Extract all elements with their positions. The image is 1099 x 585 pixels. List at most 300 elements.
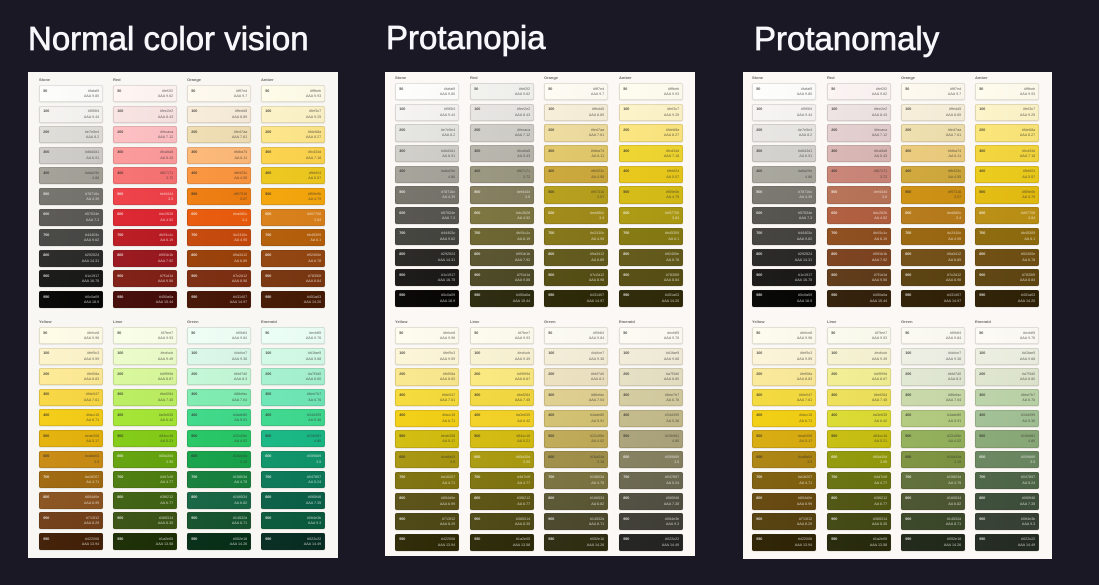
column: Stone: 700 — [399, 231, 405, 235]
column: Red: #991b1b — [873, 252, 887, 256]
column: Orange: 700 — [191, 233, 197, 237]
column: Orange: #fed7aa — [234, 130, 247, 134]
column: Lime: AA 6.42 — [874, 419, 887, 423]
column: Red: #fee2e2 — [517, 107, 530, 111]
column: Lime: #d9f99d — [517, 372, 530, 376]
column: Emerald: #34d399 — [665, 413, 679, 417]
column: Emerald: 400 — [623, 413, 629, 417]
column: Red: 50 — [831, 87, 835, 91]
column: Stone: 50 — [43, 89, 47, 93]
column: Stone: #fafaf9 — [88, 89, 99, 93]
column: Green: #dcfce7 — [948, 351, 961, 355]
column: Red: #f87171 — [517, 169, 530, 173]
column: Yellow: AAA 8.29 — [440, 522, 455, 526]
column: Emerald: 50 — [265, 331, 269, 335]
column: Orange: 3.4 — [599, 216, 604, 220]
column: Emerald: AA 5.36 — [308, 418, 321, 422]
column: Lime: #1a2e05 — [159, 537, 173, 541]
column: Red: #7f1d1d — [517, 273, 530, 277]
column: Amber: AAA 14.20 — [1018, 299, 1035, 303]
column: Orange: 500 — [905, 190, 911, 194]
column: Yellow: #ca8a04 — [798, 455, 812, 459]
column: Emerald: 950 — [265, 537, 271, 541]
column: Green: 100 — [191, 351, 197, 355]
column: Green: #22c55e — [233, 434, 247, 438]
column: Yellow: Yellow — [39, 319, 51, 324]
column: Lime: AA 4.77 — [874, 481, 887, 485]
column: Lime: #84cc16 — [516, 434, 530, 438]
column: Green: AA 5.91 — [234, 418, 247, 422]
column: Lime: #ecfccb — [874, 351, 887, 355]
column: Orange: 300 — [548, 149, 554, 153]
column: Lime: AA 4.77 — [160, 480, 173, 484]
column: Lime: AA 5.21 — [874, 439, 887, 443]
column: Amber: #92400e — [1021, 252, 1035, 256]
column: Stone: AAA 14.31 — [82, 259, 99, 263]
column: Amber: #fde68a — [666, 128, 679, 132]
column: Stone: 300 — [399, 149, 405, 153]
column: Stone: #292524 — [85, 253, 99, 257]
column: Amber: AA 6.78 — [308, 259, 321, 263]
column: Stone: Stone — [395, 75, 406, 80]
column: Stone: AA 4.39 — [799, 195, 812, 199]
column: Orange: AAA 9.7 — [948, 92, 961, 96]
column: Yellow: #fef08a — [800, 372, 812, 376]
column: Orange: 700 — [548, 231, 554, 235]
column: Lime: AA 6.77 — [517, 502, 530, 506]
column: Orange: AA 6.89 — [234, 259, 247, 263]
column: Green: 600 — [548, 455, 554, 459]
column: Lime: AAA 13.58 — [156, 542, 173, 546]
column: Red: 600 — [117, 212, 123, 216]
column: Stone: #57534e — [441, 211, 455, 215]
column: Green: 500 — [548, 434, 554, 438]
column: Green: AA 4.02 — [234, 439, 247, 443]
column: Yellow: 900 — [399, 517, 405, 521]
column: Orange: 500 — [191, 192, 197, 196]
column: Lime: AAA 8.35 — [872, 522, 887, 526]
column: Yellow: AAA 9.59 — [797, 357, 812, 361]
column: Yellow: AAA 13.94 — [82, 542, 99, 546]
column: Orange: 600 — [548, 211, 554, 215]
column: Orange: 100 — [548, 107, 554, 111]
column: Red: AA 6.19 — [517, 237, 530, 241]
column: Lime: #bef264 — [517, 393, 530, 397]
column: Yellow: 300 — [399, 393, 405, 397]
column: Emerald: 100 — [623, 351, 629, 355]
column: Yellow: #fef9c3 — [443, 351, 455, 355]
column: Yellow: #facc15 — [86, 413, 99, 417]
column: Yellow: #eab308 — [798, 434, 812, 438]
column: Orange: AAA 8.89 — [232, 115, 247, 119]
column: Stone: #44403c — [85, 233, 99, 237]
column: Amber: AA 6.1 — [668, 237, 679, 241]
column: Orange: #fb923c — [591, 169, 604, 173]
column: Red: #dc2626 — [516, 211, 530, 215]
column: Yellow: #eab308 — [85, 434, 99, 438]
column: Stone: 900 — [43, 274, 49, 278]
column: Yellow: 500 — [756, 434, 762, 438]
column: Yellow: AAA 13.94 — [795, 543, 812, 547]
column: Emerald: 900 — [623, 517, 629, 521]
column: Emerald: AA 5.36 — [666, 419, 679, 423]
column: Orange: #431407 — [947, 293, 961, 297]
column: Red: 200 — [831, 128, 837, 132]
column: Emerald — [974, 319, 1040, 552]
column: Yellow: AA 5.17 — [86, 439, 99, 443]
column: Red: #fecaca — [160, 130, 173, 134]
column: Amber: #fbbf24 — [667, 169, 679, 173]
column: Emerald: 100 — [265, 351, 271, 355]
column: Green: #14532d — [233, 516, 247, 520]
column: Yellow: #a16207 — [798, 475, 812, 479]
column: Emerald: 400 — [979, 413, 985, 417]
column: Stone: 800 — [399, 252, 405, 256]
column: Yellow: #713f12 — [799, 517, 812, 521]
column: Emerald: 4.80 — [314, 439, 321, 443]
column: Stone: #292524 — [798, 252, 812, 256]
column: Green: #f0fdf4 — [593, 331, 604, 335]
column: Red: AAA 9.62 — [158, 94, 173, 98]
column: Red: AAA 8.43 — [872, 113, 887, 117]
column: Emerald: 300 — [265, 392, 271, 396]
column: Green: #052e16 — [590, 537, 604, 541]
column: Orange: 3.4 — [956, 216, 961, 220]
column: Green: AAA 9.84 — [589, 336, 604, 340]
column: Lime: 100 — [117, 351, 123, 355]
column: Yellow: AAA 8.83 — [84, 377, 99, 381]
column: Green: AAA 9.36 — [946, 357, 961, 361]
column: Green: 300 — [905, 393, 911, 397]
column: Lime: AA 4.77 — [517, 481, 530, 485]
column: Green: AAA 7.04 — [946, 398, 961, 402]
column: Yellow: AAA 9.59 — [84, 357, 99, 361]
column: Emerald: AA 6.76 — [666, 398, 679, 402]
column: Lime: 800 — [117, 495, 123, 499]
column: Stone: AAA 9.44 — [797, 113, 812, 117]
column: Emerald: Emerald — [975, 319, 991, 324]
column: Red: #7f1d1d — [874, 273, 887, 277]
column: Red: 500 — [831, 190, 837, 194]
column: Emerald: AAA 9.76 — [664, 336, 679, 340]
column: Emerald: #d1fae5 — [1022, 351, 1035, 355]
column: Yellow: #fef9c3 — [87, 351, 99, 355]
column: Orange: #fff7ed — [950, 87, 961, 91]
column: Red: AA 5.43 — [874, 154, 887, 158]
column: Orange: 3.4 — [242, 218, 247, 222]
column: Amber: 100 — [265, 109, 271, 113]
column: Green: AA 5.91 — [591, 419, 604, 423]
column: Lime: #ecfccb — [517, 351, 530, 355]
column: Orange: AA 6.89 — [948, 258, 961, 262]
column: Yellow: 200 — [399, 372, 405, 376]
column: Orange: 950 — [905, 293, 911, 297]
column: Amber: AAA 8.84 — [1020, 278, 1035, 282]
column: Amber: 600 — [623, 211, 629, 215]
column: Green: AAA 7.04 — [589, 398, 604, 402]
column: Lime: AAA 8.35 — [158, 521, 173, 525]
column: Stone: 950 — [399, 293, 405, 297]
column: Lime: AAA 9.49 — [158, 357, 173, 361]
column: Emerald: Emerald — [261, 319, 277, 324]
column: Amber: #fcd34d — [666, 149, 679, 153]
column: Red: #fef2f2 — [876, 87, 887, 91]
column: Stone: AAA 9.62 — [797, 237, 812, 241]
column: Yellow: AA 6.71 — [799, 419, 812, 423]
column: Lime: 100 — [831, 351, 837, 355]
column: Lime: Lime — [113, 319, 122, 324]
column: Lime: 700 — [474, 475, 480, 479]
column: Lime: 950 — [831, 537, 837, 541]
column: Yellow: AA 4.71 — [442, 481, 455, 485]
column: Amber: #f59e0b — [308, 192, 321, 196]
column: Red: AAA 9.56 — [515, 278, 530, 282]
column: Amber: 600 — [265, 212, 271, 216]
column: Stone: AAA 9.44 — [84, 115, 99, 119]
column: Yellow: 3.9 — [807, 460, 812, 464]
column: Orange: AAA 14.97 — [587, 299, 604, 303]
column: Stone: #f5f5f4 — [88, 109, 99, 113]
column: Green: AAA 14.26 — [587, 543, 604, 547]
column: Yellow: 400 — [756, 413, 762, 417]
column: Orange: #ea580c — [590, 211, 604, 215]
column: Orange: #fdba74 — [234, 150, 247, 154]
column: Lime: #d9f99d — [160, 372, 173, 376]
column: Amber: AAA 9.93 — [1020, 92, 1035, 96]
column: Stone: 200 — [43, 130, 49, 134]
column: Red: #dc2626 — [159, 212, 173, 216]
column: Amber: AA 5.57 — [666, 175, 679, 179]
column: Amber: AA 5.57 — [308, 176, 321, 180]
column: Lime: #a3e635 — [159, 413, 173, 417]
column: Yellow: #fde047 — [799, 393, 812, 397]
column: Green: 950 — [191, 537, 197, 541]
column: Stone: 200 — [399, 128, 405, 132]
column: Amber: #fbbf24 — [309, 171, 321, 175]
column: Orange: AA 4.95 — [234, 238, 247, 242]
column: Red: Red — [470, 75, 478, 80]
column: Orange: #9a3412 — [590, 252, 604, 256]
column: Yellow: 700 — [399, 475, 405, 479]
column: Amber: AAA 8.27 — [1020, 133, 1035, 137]
column: Amber: AAA 14.20 — [662, 299, 679, 303]
column: Yellow: 500 — [399, 434, 405, 438]
column: Red: AAA 7.92 — [515, 258, 530, 262]
column: Amber: #b45309 — [1021, 231, 1035, 235]
column: Lime: #bef264 — [160, 392, 173, 396]
column: Yellow: 700 — [43, 475, 49, 479]
column: Green: 50 — [191, 331, 195, 335]
column: Green: #bbf7d0 — [948, 372, 961, 376]
column: Green — [186, 319, 252, 551]
column: Yellow: #422006 — [85, 537, 99, 541]
column: Orange: #fb923c — [948, 169, 961, 173]
column: Green: 400 — [548, 413, 554, 417]
panel: protanomaly palette — [743, 72, 1052, 559]
column: Stone: AAA 9.44 — [440, 113, 455, 117]
column: Yellow: AAA 8.29 — [797, 522, 812, 526]
column: Yellow: 500 — [43, 434, 49, 438]
column: Amber: #fcd34d — [308, 150, 321, 154]
column: Amber: AAA 8.84 — [664, 278, 679, 282]
column: Green: #15803d — [233, 475, 247, 479]
column: Green: #22c55e — [947, 434, 961, 438]
column: Emerald: 3.5 — [316, 460, 321, 464]
column: Orange: AAA 8.89 — [589, 113, 604, 117]
column: Yellow: 300 — [756, 393, 762, 397]
column: Green: 900 — [191, 516, 197, 520]
column: Lime — [826, 319, 892, 552]
column: Emerald: #34d399 — [1021, 413, 1035, 417]
column: Orange: 300 — [191, 150, 197, 154]
column: Green: 300 — [191, 392, 197, 396]
column: Yellow: AA 6.71 — [86, 418, 99, 422]
column: Lime: #d9f99d — [874, 372, 887, 376]
column: Stone: AA 6.91 — [799, 154, 812, 158]
column: Yellow: 3.9 — [94, 460, 99, 464]
column: Stone: 200 — [756, 128, 762, 132]
column: Lime: AA 5.21 — [160, 439, 173, 443]
column: Lime: AAA 7.45 — [872, 398, 887, 402]
column: Green: 50 — [548, 331, 552, 335]
column: Orange: 900 — [905, 273, 911, 277]
column: Stone: AAA 8.2 — [86, 135, 99, 139]
column: Amber: #fcd34d — [1022, 149, 1035, 153]
column: Emerald: #022c22 — [1021, 537, 1035, 541]
column: Stone: AAA 9.62 — [84, 238, 99, 242]
column: Stone: AAA 9.62 — [440, 237, 455, 241]
column: Emerald: AAA 7.35 — [306, 501, 321, 505]
column: Yellow: 900 — [43, 516, 49, 520]
column: Green: #166534 — [590, 496, 604, 500]
column: Yellow: 950 — [399, 537, 405, 541]
column: Orange: #ffedd5 — [949, 107, 961, 111]
column: Lime: AAA 9.93 — [872, 336, 887, 340]
column: Green — [544, 319, 608, 552]
column: Stone: AAA 8.2 — [799, 133, 812, 137]
column: Amber: 600 — [979, 211, 985, 215]
column: Green: #166534 — [947, 496, 961, 500]
column: Yellow: AAA 8.83 — [440, 377, 455, 381]
column: Yellow — [38, 319, 104, 551]
column: Orange: 400 — [905, 169, 911, 173]
column: Yellow: 100 — [756, 351, 762, 355]
column: Red: AA 5.43 — [160, 156, 173, 160]
column: Emerald: AAA 9.68 — [306, 357, 321, 361]
column: Stone: AAA 9.80 — [440, 92, 455, 96]
column: Yellow: 600 — [43, 454, 49, 458]
column: Amber: AAA 7.18 — [664, 154, 679, 158]
column: Emerald: AAA 7.35 — [1020, 502, 1035, 506]
column: Yellow: AAA 9.59 — [440, 357, 455, 361]
column: Stone: 500 — [43, 192, 49, 196]
column: Green: AAA 9.36 — [232, 357, 247, 361]
column: Stone: #1c1917 — [85, 274, 99, 278]
column: Emerald: Emerald — [619, 319, 635, 324]
column: Orange: #c2410c — [233, 233, 247, 237]
column: Stone: #d6d3d1 — [85, 150, 99, 154]
column: Emerald: #065f46 — [308, 495, 321, 499]
column: Orange: AAA 8.98 — [232, 279, 247, 283]
column: Red: AAA 9.56 — [158, 279, 173, 283]
column: Yellow: AAA 13.94 — [438, 543, 455, 547]
column: Lime: 600 — [117, 454, 123, 458]
column: Emerald: AAA 9.3 — [308, 521, 321, 525]
column: Yellow: #facc15 — [442, 413, 455, 417]
column: Yellow: #a16207 — [441, 475, 455, 479]
column: Emerald: 100 — [979, 351, 985, 355]
column: Green: AAA 9.84 — [946, 336, 961, 340]
column: Amber: #78350f — [666, 273, 679, 277]
column: Orange: AAA 8.98 — [589, 278, 604, 282]
column: Emerald: 400 — [265, 413, 271, 417]
column: Lime: #84cc16 — [873, 434, 887, 438]
column: Lime — [112, 319, 178, 551]
column: Stone: #e7e5e4 — [441, 128, 455, 132]
column: Emerald: #047857 — [1021, 475, 1035, 479]
column: Emerald: AAA 14.49 — [662, 543, 679, 547]
column: Lime: 950 — [474, 537, 480, 541]
column: Yellow: 700 — [756, 475, 762, 479]
column: Stone: 300 — [43, 150, 49, 154]
column: Emerald: 50 — [623, 331, 627, 335]
column: Lime: #1a2e05 — [516, 537, 530, 541]
column: Green: AA 6.82 — [234, 501, 247, 505]
column: Orange: 50 — [191, 89, 195, 93]
column: Amber: #f59e0b — [1022, 190, 1035, 194]
column: Stone: 100 — [43, 109, 49, 113]
column: Amber: 900 — [623, 273, 629, 277]
column: Amber: AAA 8.27 — [664, 133, 679, 137]
column: Stone: #0c0a09 — [441, 293, 455, 297]
column: Orange: 3.07 — [240, 197, 247, 201]
column: Green: 400 — [905, 413, 911, 417]
column: Lime: AAA 13.58 — [870, 543, 887, 547]
column: Lime: AAA 9.93 — [158, 336, 173, 340]
column: Lime: AAA 9.49 — [515, 357, 530, 361]
column: Red: 900 — [117, 274, 123, 278]
column: Amber — [618, 75, 684, 308]
column: Stone: #57534e — [85, 212, 99, 216]
column: Orange: 400 — [548, 169, 554, 173]
column: Emerald: 600 — [979, 455, 985, 459]
column: Lime: 400 — [474, 413, 480, 417]
column: Stone: #f5f5f4 — [801, 107, 812, 111]
column: Green: 600 — [191, 454, 197, 458]
column: Orange: #fed7aa — [591, 128, 604, 132]
column: Lime: 900 — [831, 517, 837, 521]
column: Red: 3.72 — [166, 176, 173, 180]
column: Amber: 950 — [979, 293, 985, 297]
column: Lime: 400 — [117, 413, 123, 417]
column: Amber: AA 6.78 — [1022, 258, 1035, 262]
column: Lime: #365314 — [873, 517, 887, 521]
column: Green: #bbf7d0 — [234, 372, 247, 376]
column: Red: 300 — [831, 149, 837, 153]
column: Red: 950 — [831, 293, 837, 297]
column: Lime: 50 — [117, 331, 121, 335]
column: Amber: #fffbeb — [1024, 87, 1035, 91]
column: Emerald: #065f46 — [1022, 496, 1035, 500]
column: Amber: AA 6.1 — [310, 238, 321, 242]
column: Orange: 900 — [548, 273, 554, 277]
column: Orange: AAA 14.97 — [230, 300, 247, 304]
column: Red: 3.5 — [168, 197, 173, 201]
column: Orange: AAA 8.98 — [946, 278, 961, 282]
column: Lime: 50 — [474, 331, 478, 335]
column: Yellow — [752, 319, 816, 552]
column: Stone: 950 — [756, 293, 762, 297]
